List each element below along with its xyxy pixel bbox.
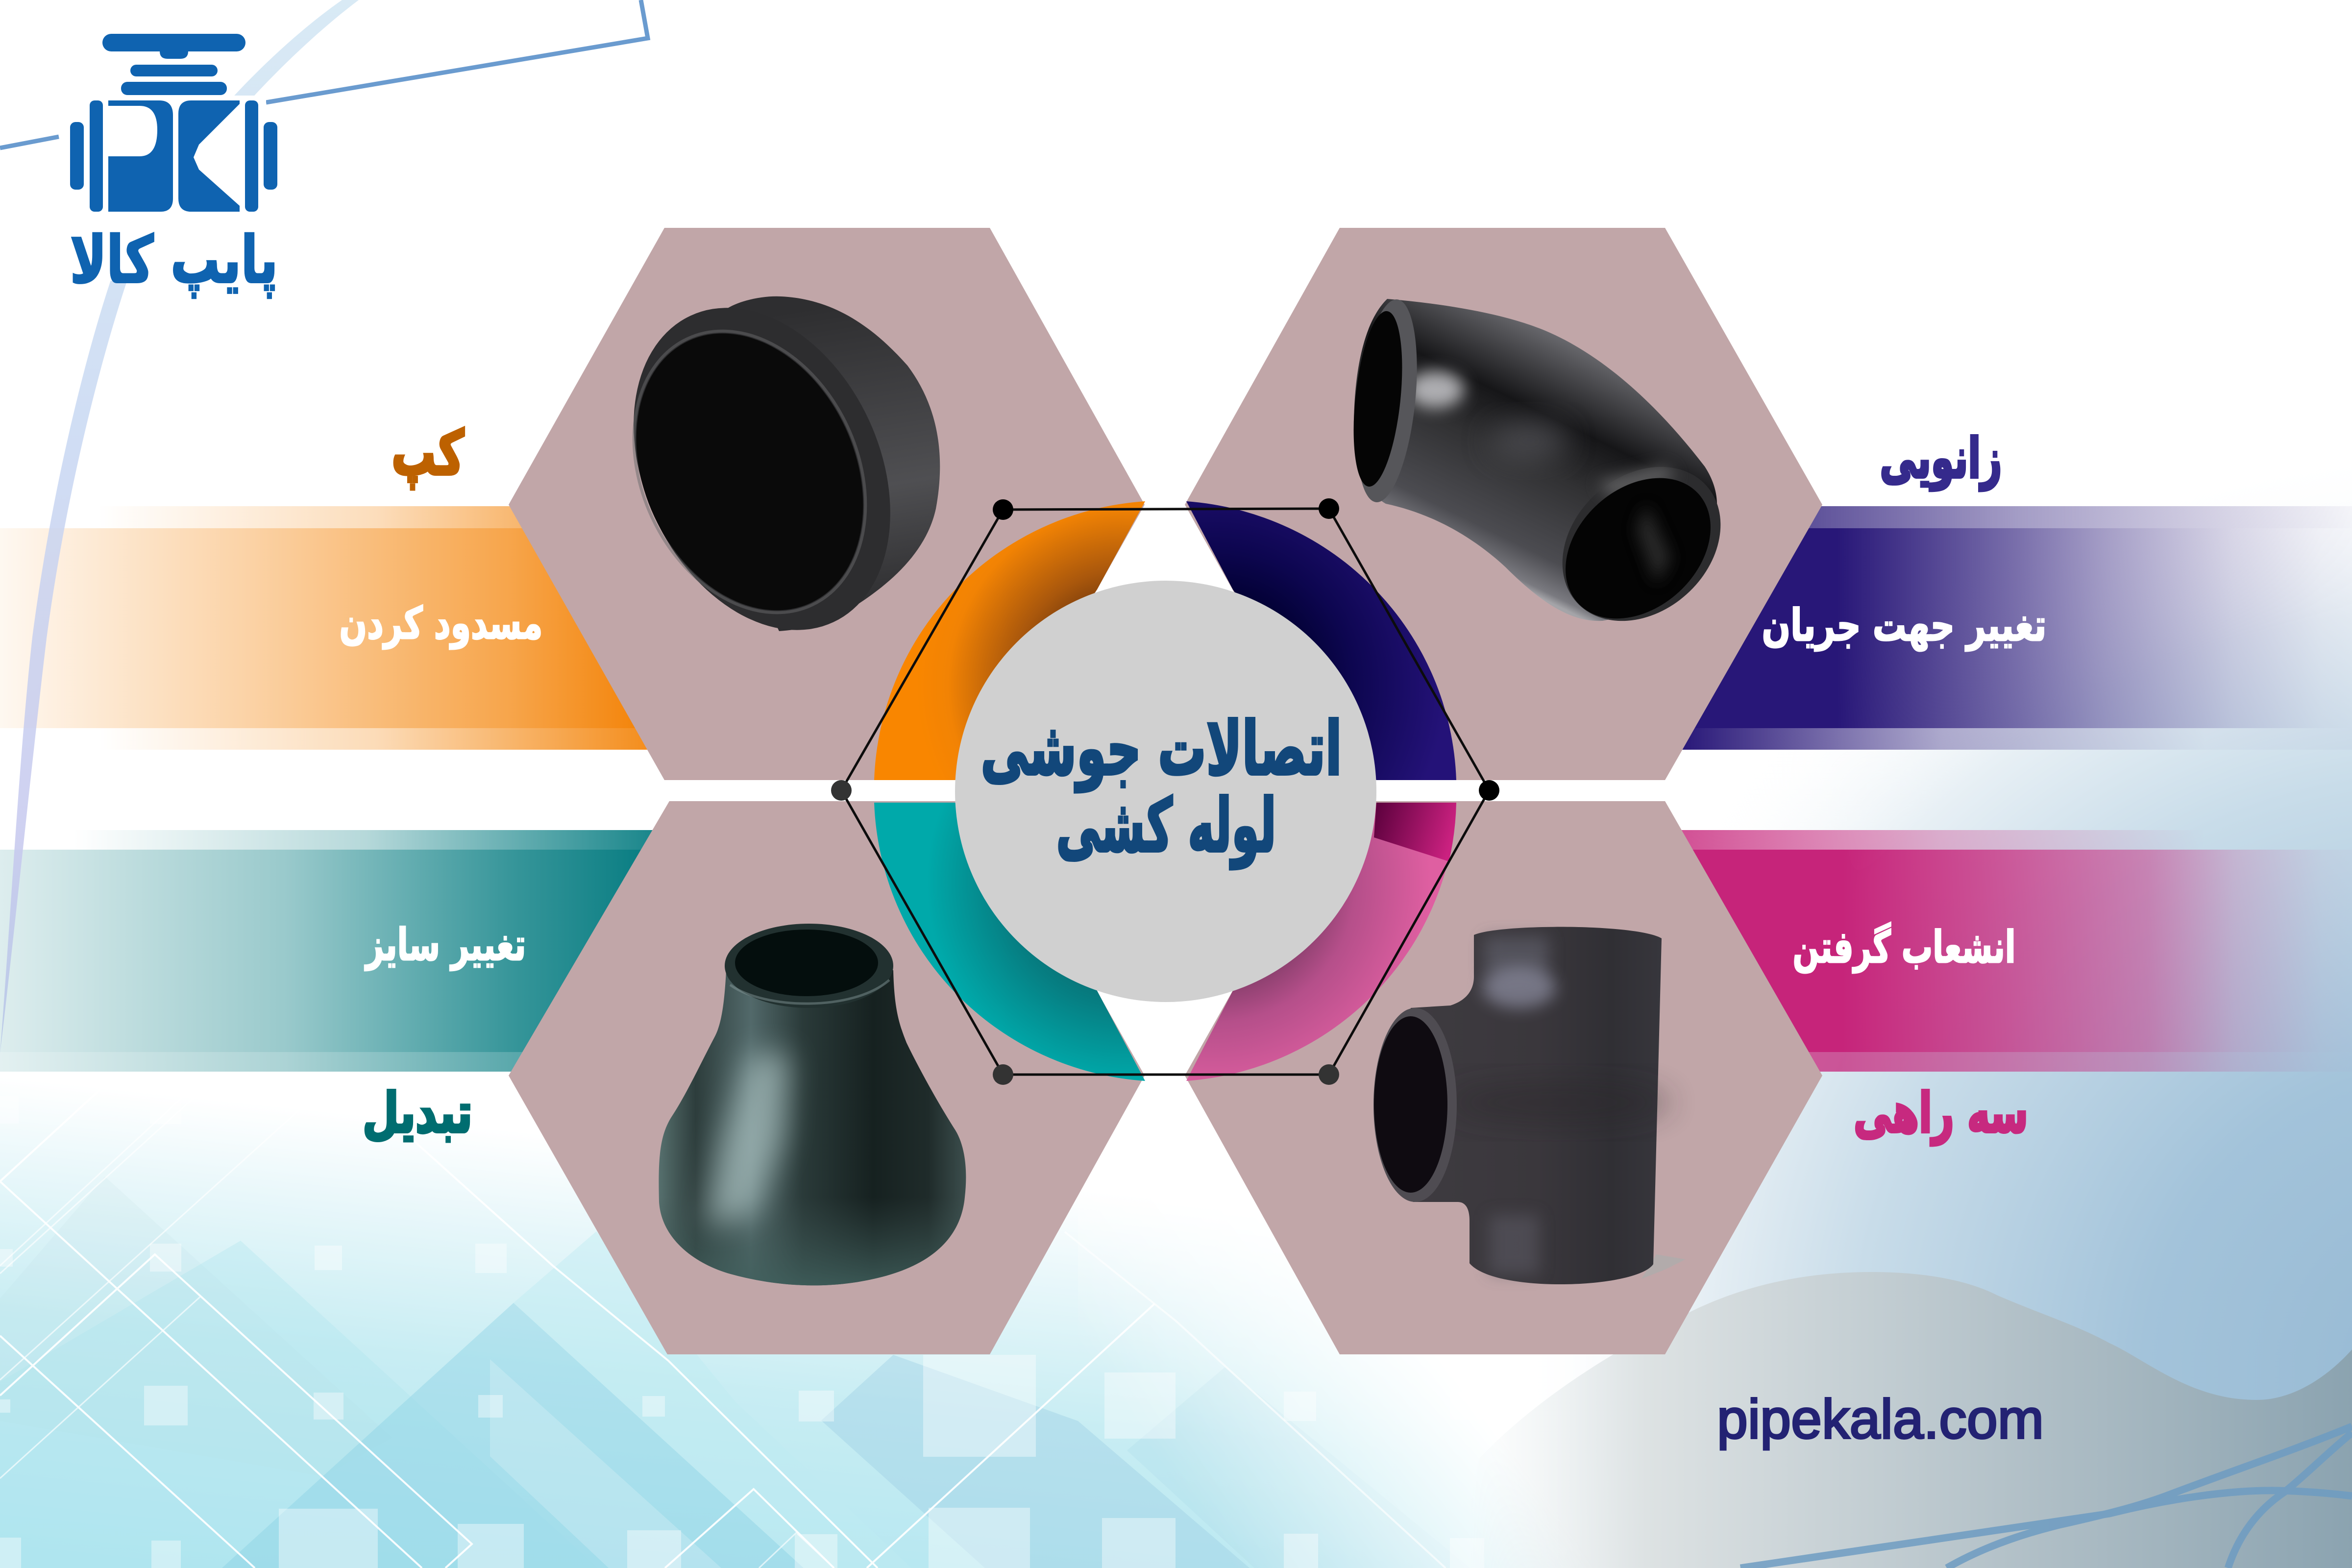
ring segment: magenta [1186,803,1456,1081]
label: tee function: انشعاب گرفتن [1792,922,2016,973]
bar: purple [1676,506,2352,750]
background: thin white diagonal lines [0,1078,1446,1568]
bar: orange [0,506,657,750]
label: elbow title: زانویی [1880,427,2002,490]
bar: teal [0,830,657,1072]
label: reducer title: تبدیل [363,1081,472,1145]
icon: pipe reducer [659,924,966,1285]
website url: pipekala.com [1717,1388,2044,1450]
ring segment: orange [874,501,1145,780]
ring segment: purple [1186,501,1456,780]
background: white fade towards the right [1078,1054,1666,1568]
icon: pipe cap [584,266,940,672]
decorative light curve at left [0,0,359,1054]
background: right blue wash [1421,392,2352,1568]
icon: pipe elbow [1346,296,1752,653]
panel: hexagon bottom-left [509,801,1145,1354]
background: grey wave shape [1460,1272,2352,1568]
logo: valve mark [70,34,277,212]
background: translucent white rectangles [0,1096,1484,1568]
background: lower-left pale blue wash [0,1054,1666,1568]
label: cap title: کپ [392,418,464,490]
background: blue straight line top [0,0,648,148]
title: centre heading: اتصالات جوشی [981,707,1342,792]
label: cap function: مسدود کردن [339,598,543,650]
bar: magenta [1676,830,2352,1072]
label: tee title: سه راهی [1854,1081,2028,1145]
ring segment: teal [874,803,1145,1081]
title: centre heading: لوله کشی [1056,784,1276,869]
background: translucent triangles [0,1176,1470,1568]
label: elbow function: تغییر جهت جریان [1762,600,2046,651]
panel: hexagon bottom-right [1185,801,1822,1354]
logo: white backing [61,96,266,281]
background: blue lines, bottom right [1740,1426,2352,1568]
panel: hexagon top-left [509,228,1145,780]
title: centre heading [981,707,1342,869]
label: reducer function: تغییر سایز [365,919,526,971]
hexagon outline with dots [831,498,1499,1085]
icon: pipe tee [1373,927,1686,1284]
centre circle [955,581,1376,1002]
logo: wordmark: پایپ کالا [70,222,278,298]
panel: hexagon top-right [1185,228,1822,780]
